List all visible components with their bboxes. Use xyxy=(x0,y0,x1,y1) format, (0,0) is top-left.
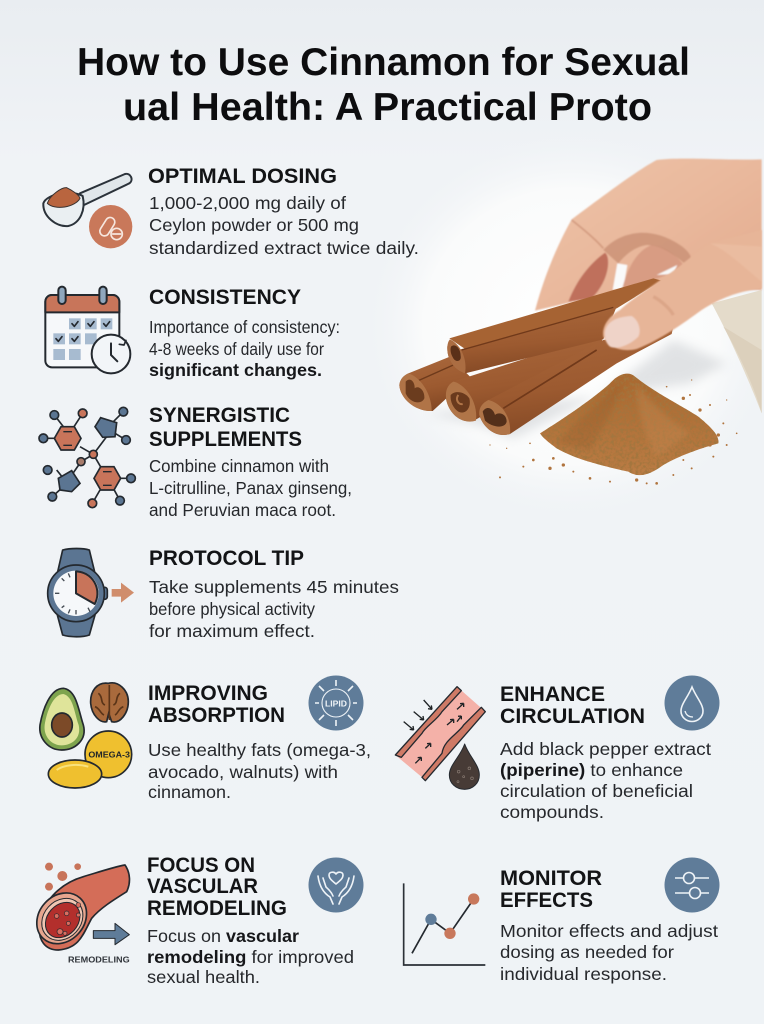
section: focus on vascular remodeling xyxy=(27,854,363,987)
body text: Focus on vascular xyxy=(147,926,299,946)
body text xyxy=(149,577,399,641)
icon: avocado, walnut, omega-3 capsules xyxy=(40,683,132,788)
body text: Take supplements 45 minutes xyxy=(149,577,399,597)
section: optimal dosing xyxy=(43,165,419,258)
upper stick xyxy=(447,307,617,373)
heading: VASCULAR xyxy=(147,875,258,898)
body text: Importance of consistency: xyxy=(149,317,340,337)
body text: before physical activity xyxy=(149,599,315,619)
body text: Ceylon powder or 500 mg xyxy=(149,215,359,235)
heading xyxy=(147,854,287,920)
body text xyxy=(148,740,371,802)
body text: avocado, walnuts) with xyxy=(148,762,338,782)
top stick xyxy=(449,278,662,350)
title: ual Health: A Practical Proto xyxy=(123,86,652,129)
body text: significant changes. xyxy=(149,360,322,380)
heading: EFFECTS xyxy=(500,889,593,912)
icon: molecules xyxy=(39,407,135,508)
body text: standardized extract twice daily. xyxy=(149,238,419,258)
body text: L-citrulline, Panax ginseng, xyxy=(149,478,352,498)
title: How to Use Cinnamon for Sexual xyxy=(77,41,690,84)
heading xyxy=(500,867,602,912)
heading: SUPPLEMENTS xyxy=(149,428,302,451)
heading: ENHANCE xyxy=(500,683,605,706)
body text xyxy=(500,739,711,822)
icon: sliders badge xyxy=(664,858,720,912)
section: consistency xyxy=(45,286,340,380)
body text: compounds. xyxy=(500,802,604,822)
icon: drop badge xyxy=(664,676,720,730)
section: monitor effects xyxy=(404,858,720,984)
section: enhance circulation xyxy=(395,676,720,822)
body text: sexual health. xyxy=(147,967,260,987)
icon: artery cross-section: REMODELING xyxy=(68,955,130,965)
middle stick xyxy=(446,335,607,422)
body text: cinnamon. xyxy=(148,782,231,802)
cinnamon powder pile xyxy=(489,374,737,485)
body text: Combine cinnamon with xyxy=(149,456,329,476)
section: protocol tip xyxy=(48,547,399,641)
heading: OPTIMAL DOSING xyxy=(148,165,337,188)
thumb xyxy=(603,230,762,350)
body text: dosing as needed for xyxy=(500,942,674,962)
body text: remodeling for improved xyxy=(147,947,354,967)
photo: hand with cinnamon sticks and powder xyxy=(360,130,764,523)
heading: CONSISTENCY xyxy=(149,286,301,309)
heading xyxy=(500,683,645,728)
body text: Monitor effects and adjust xyxy=(500,921,718,941)
icon: hands and heart badge xyxy=(308,858,364,912)
icon: watch with arrow xyxy=(48,548,134,637)
heading xyxy=(148,682,285,727)
icon: avocado, walnut, omega-3 capsules: OMEGA-3 xyxy=(88,750,130,760)
heading: PROTOCOL TIP xyxy=(149,547,304,570)
body text: individual response. xyxy=(500,964,667,984)
body text xyxy=(149,456,352,520)
section: improving absorption xyxy=(40,676,371,802)
heading xyxy=(149,404,302,451)
icon: lipid badge: LIPID xyxy=(325,698,347,708)
icon: calendar and clock xyxy=(45,287,130,373)
stick shadows xyxy=(427,340,727,438)
body text xyxy=(149,317,340,380)
body text: 1,000-2,000 mg daily of xyxy=(149,193,346,213)
heading: FOCUS ON xyxy=(147,854,255,877)
cinnamon sticks xyxy=(399,278,673,435)
hand palm and fingers xyxy=(535,159,762,311)
title xyxy=(77,41,690,129)
body text: for maximum effect. xyxy=(149,621,315,641)
heading: IMPROVING xyxy=(148,682,268,705)
body text: and Peruvian maca root. xyxy=(149,500,336,520)
front stick xyxy=(479,327,673,435)
body text: Use healthy fats (omega-3, xyxy=(148,740,371,760)
icon: lipid badge xyxy=(308,676,364,730)
icon: line chart xyxy=(404,883,485,965)
heading: REMODELING xyxy=(147,897,287,920)
body text xyxy=(147,926,354,987)
fabric cloth xyxy=(712,290,762,413)
body text: (piperine) to enhance xyxy=(500,760,683,780)
heading: MONITOR xyxy=(500,867,602,890)
heading: ABSORPTION xyxy=(148,704,285,727)
body text xyxy=(149,193,419,258)
body text: 4-8 weeks of daily use for xyxy=(149,339,324,359)
icon: artery cross-section xyxy=(27,863,130,965)
icon: blood vessel and pepper drop xyxy=(395,687,485,789)
icon: spoon and pills xyxy=(43,174,132,248)
section: synergistic supplements xyxy=(39,404,352,520)
body text: Add black pepper extract xyxy=(500,739,711,759)
heading: CIRCULATION xyxy=(500,705,645,728)
body text xyxy=(500,921,718,984)
body text: circulation of beneficial xyxy=(500,781,693,801)
heading: SYNERGISTIC xyxy=(149,404,290,427)
back left stick xyxy=(399,357,470,411)
